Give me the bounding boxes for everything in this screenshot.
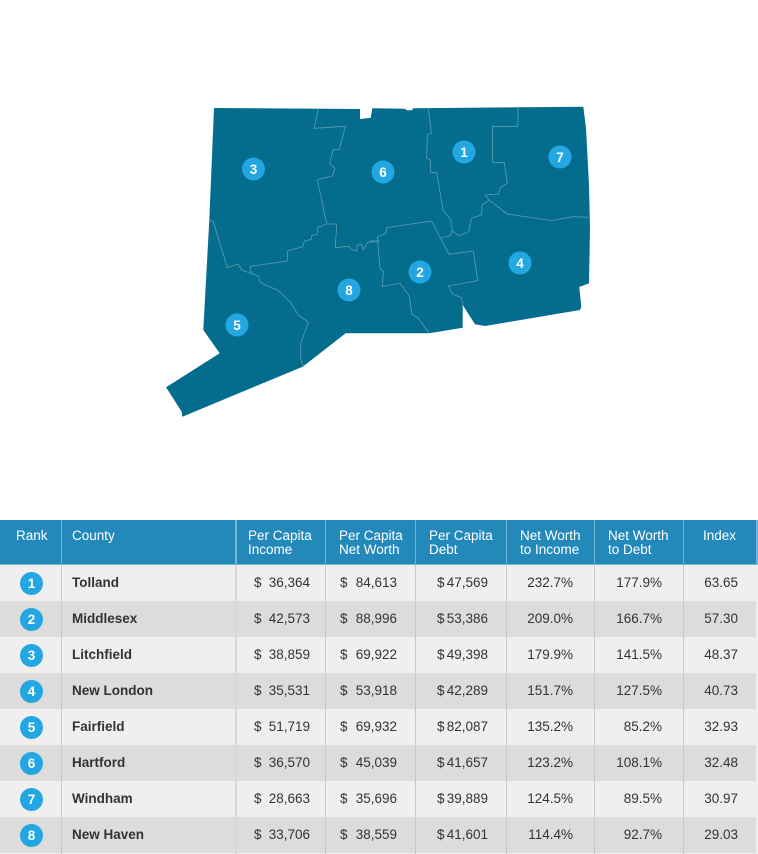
marker: Windham [548,146,572,168]
row: Tolland: $ [254,575,262,590]
row: Windham: 124.5% [527,791,573,806]
row: New London: 35,531 [269,683,310,698]
row: Tolland: 1 [28,576,35,590]
table header: to Income [520,542,579,557]
table header: Per Capita [339,528,403,543]
row: Tolland: 63.65 [704,575,738,590]
marker: Hartford [372,160,394,184]
table header: Per Capita [248,528,312,543]
row: New London: New London [72,683,153,698]
row: Fairfield: $ [254,719,262,734]
marker: Middlesex: 2 [416,265,424,280]
row: New Haven: 41,601 [447,827,488,842]
row: Windham: 30.97 [704,791,738,806]
row: Tolland: $ [340,575,348,590]
row: Hartford: Hartford [72,755,125,770]
ranking table [0,520,758,854]
row: Fairfield: 5 [28,720,35,734]
marker: Tolland: 1 [460,145,468,160]
row: New Haven: 33,706 [269,827,310,842]
map of Connecticut counties [166,106,590,417]
marker: New Haven [338,278,360,302]
table header: Income [248,542,292,557]
marker: New London [508,252,532,274]
row: Fairfield: 135.2% [527,719,573,734]
row: Hartford: $ [254,755,262,770]
row: Litchfield: $ [340,647,348,662]
row: Hartford: 123.2% [527,755,573,770]
row: Tolland: 36,364 [269,575,310,590]
marker: Middlesex [408,260,432,284]
row: New Haven: 114.4% [528,827,573,842]
row: Fairfield: 69,932 [356,719,397,734]
row: Windham: 89.5% [624,791,662,806]
row: Tolland: 47,569 [447,575,488,590]
row: Fairfield: 32.93 [704,719,738,734]
row: Windham: 7 [28,792,35,806]
row: Middlesex: 209.0% [527,611,573,626]
table header: Index [703,528,736,543]
row: New London: $ [437,683,445,698]
row: Hartford: 6 [28,756,35,770]
row: New Haven: $ [340,827,348,842]
row: Litchfield: 49,398 [447,647,488,662]
row: Windham: $ [437,791,445,806]
row: Hartford: $ [340,755,348,770]
row: Middlesex: 53,386 [447,611,488,626]
row: New London: $ [254,683,262,698]
row: Litchfield: 141.5% [616,647,662,662]
table header: County [72,528,115,543]
table header: Per Capita [429,528,493,543]
state shape [166,107,590,417]
marker: Litchfield [242,158,265,180]
row: New London [0,673,756,709]
row: Fairfield: 85.2% [624,719,662,734]
row: Windham: Windham [72,791,133,806]
row: Litchfield: 3 [28,648,35,662]
row: Tolland: $ [437,575,445,590]
row: New London: 42,289 [447,683,488,698]
row: Windham [0,781,756,817]
table header: Net Worth [520,528,581,543]
marker: Hartford: 6 [379,165,387,180]
row: Tolland: Tolland [72,575,119,590]
row: Hartford: 45,039 [356,755,397,770]
row: New Haven: 92.7% [624,827,662,842]
table header [0,520,758,565]
row: New Haven: New Haven [72,827,144,842]
row: New Haven: 38,559 [356,827,397,842]
row: Windham: 28,663 [269,791,310,806]
row: Hartford [0,745,756,781]
row: Fairfield: 82,087 [447,719,488,734]
row: Hartford: 32.48 [704,755,738,770]
row: Windham: $ [340,791,348,806]
row: Middlesex: 42,573 [269,611,310,626]
row: Hartford: 41,657 [447,755,488,770]
row: Litchfield: $ [254,647,262,662]
row: Middlesex: 2 [28,612,35,626]
marker: Windham: 7 [556,150,564,165]
marker: Fairfield [226,314,248,336]
row: Middlesex: $ [437,611,445,626]
row: Fairfield: Fairfield [72,719,125,734]
table header: Rank [16,528,48,543]
row: Tolland: 232.7% [527,575,573,590]
row: New Haven: $ [437,827,445,842]
row: New London: 127.5% [616,683,662,698]
row: New Haven: 8 [28,828,35,842]
marker: New Haven: 8 [345,283,353,298]
row: Fairfield: $ [437,719,445,734]
row: Litchfield: 69,922 [356,647,397,662]
row: Middlesex: Middlesex [72,611,137,626]
row: Middlesex [0,601,756,637]
row: Litchfield: Litchfield [72,647,132,662]
row: New London: 53,918 [356,683,397,698]
row: New London: 151.7% [527,683,573,698]
row: Windham: 35,696 [356,791,397,806]
row: Middlesex: $ [254,611,262,626]
row: Windham: $ [254,791,262,806]
row: Tolland: 177.9% [616,575,662,590]
marker: Tolland [452,140,476,164]
table header: Net Worth [608,528,669,543]
row: Hartford: 36,570 [269,755,310,770]
row: Fairfield [0,709,756,745]
row: Windham: 39,889 [447,791,488,806]
row: Fairfield: $ [340,719,348,734]
row: Fairfield: 51,719 [269,719,310,734]
table header: Debt [429,542,458,557]
row: Hartford: $ [437,755,445,770]
eastern county borders [370,107,588,333]
row: New London: 4 [28,684,35,698]
row: Tolland [0,565,756,601]
row: New London: $ [340,683,348,698]
row: Middlesex: 166.7% [616,611,662,626]
row: New Haven: $ [254,827,262,842]
row: Litchfield: 179.9% [527,647,573,662]
row: Litchfield: $ [437,647,445,662]
row: New Haven [0,817,756,853]
row: Middlesex: $ [340,611,348,626]
row: Litchfield: 48.37 [704,647,738,662]
row: Litchfield: 38,859 [269,647,310,662]
row: New London: 40.73 [704,683,738,698]
table header: to Debt [608,542,652,557]
row: Tolland: 84,613 [356,575,397,590]
western county borders [209,109,380,367]
marker: New London: 4 [516,256,524,271]
row: New Haven: 29.03 [704,827,738,842]
row: Middlesex: 88,996 [356,611,397,626]
marker: Litchfield: 3 [250,162,258,177]
marker: Fairfield: 5 [233,318,241,333]
row: Litchfield [0,637,756,673]
table header: Net Worth [339,542,400,557]
row: Middlesex: 57.30 [704,611,738,626]
row: Hartford: 108.1% [616,755,662,770]
